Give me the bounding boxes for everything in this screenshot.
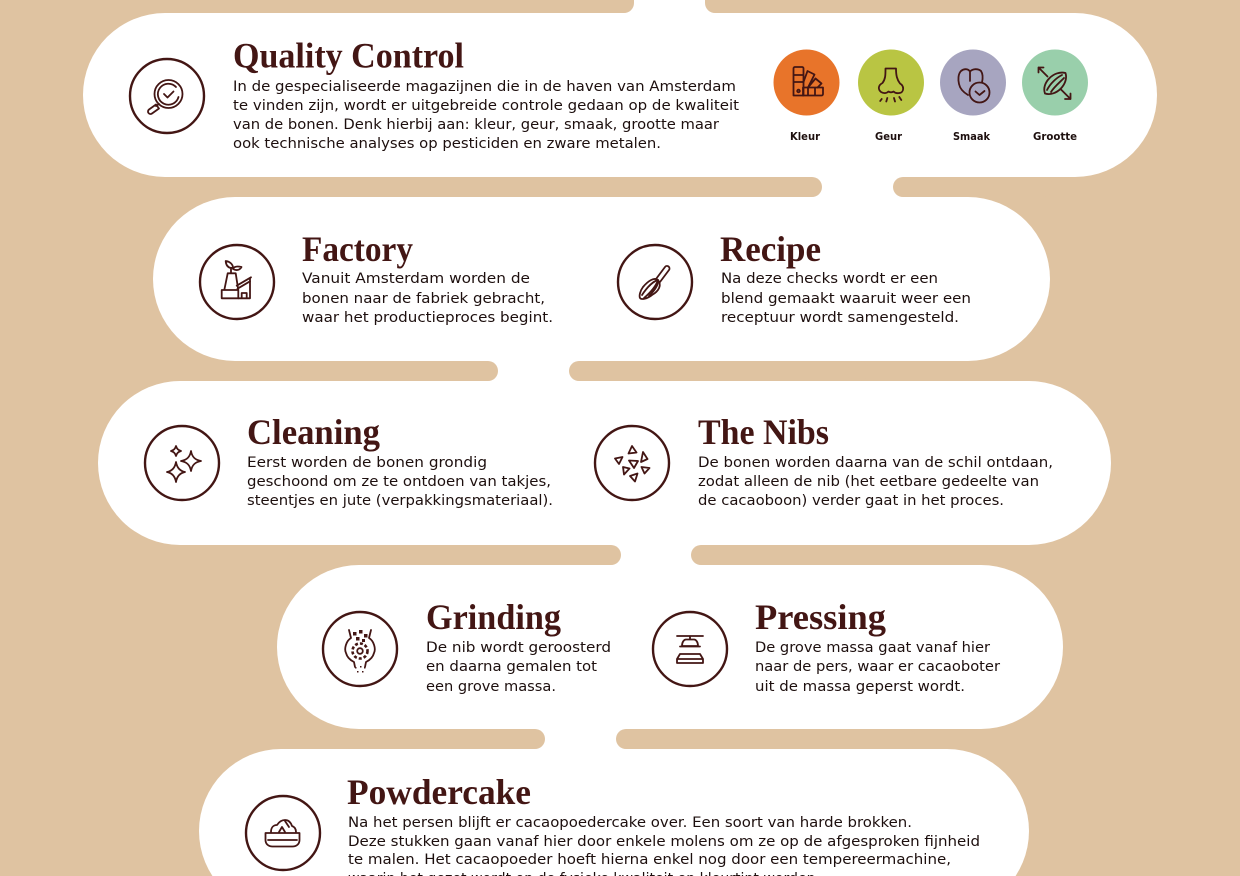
text: grinding body: De nib wordt geroosterd [426, 640, 611, 656]
icon: grootte [1022, 50, 1088, 116]
text: factory body: bonen naar de fabriek gebracht, [302, 291, 545, 307]
label: smaak: Smaak [953, 131, 991, 143]
icon: geur [858, 50, 924, 116]
text: recipe body: Na deze checks wordt er een [721, 271, 938, 287]
label: grootte: Grootte [1033, 131, 1077, 143]
heading: quality control: Quality Control [233, 36, 464, 76]
panel: cleaning and the nibs [98, 381, 1111, 545]
label: kleur: Kleur [790, 131, 821, 143]
text: pressing body: uit de massa geperst wordt. [755, 679, 965, 695]
heading: recipe: Recipe [720, 229, 821, 269]
panel: powdercake [199, 749, 1029, 876]
text: powdercake body: Na het persen blijft er cacaopoedercake over. Een soort van harde brokken. [348, 815, 912, 831]
panel: grinding and pressing [277, 565, 1063, 729]
heading: powdercake: Powdercake [347, 772, 531, 812]
connector: cleaning to grinding [350, 543, 991, 567]
text: factory body [302, 271, 553, 326]
text: cleaning body: steentjes en jute (verpakkingsmateriaal). [247, 493, 553, 509]
text: grinding body: en daarna gemalen tot [426, 659, 597, 675]
icon: sparkles [145, 426, 219, 500]
text: factory body: Vanuit Amsterdam worden de [302, 271, 530, 287]
text: recipe body: blend gemaakt waaruit weer een [721, 291, 971, 307]
text: quality control body: In de gespecialiseerde magazijnen die in de haven van Amsterdam [233, 79, 736, 95]
text: pressing body: De grove massa gaat vanaf hier [755, 640, 990, 656]
text: pressing body [755, 640, 1000, 695]
text: pressing body: naar de pers, waar er cacaoboter [755, 659, 1000, 675]
heading: cleaning: Cleaning [247, 412, 380, 452]
text: factory body: waar het productieproces begint. [302, 310, 553, 326]
icon: nibs [595, 426, 669, 500]
text: quality control body: te vinden zijn, wordt er uitgebreide controle gedaan op de kwaliteit [233, 98, 739, 114]
text: recipe body: receptuur wordt samengesteld. [721, 310, 959, 326]
text: the nibs body [698, 455, 1053, 509]
text: cleaning body: Eerst worden de bonen grondig [247, 455, 487, 471]
icon: kleur [774, 50, 840, 116]
text: grinding body: een grove massa. [426, 679, 556, 695]
connector: factory to cleaning [300, 359, 869, 383]
connector: grinding to powdercake [340, 727, 916, 751]
label: geur: Geur [875, 131, 903, 143]
heading: grinding: Grinding [426, 597, 561, 637]
icon: bowl with chunks [246, 796, 320, 870]
text: quality control body: ook technische analyses op pesticiden en zware metalen. [233, 136, 661, 152]
text: powdercake body [348, 815, 980, 876]
text: the nibs body: zodat alleen de nib (het eetbare gedeelte van [698, 474, 1039, 490]
connector: quality control to factory [600, 175, 1053, 199]
text: cleaning body: geschoond om ze te ontdoen van takjes, [247, 474, 551, 490]
icon: factory [200, 245, 274, 319]
icon: smaak [940, 50, 1006, 116]
icon: whisk [618, 245, 692, 319]
icon: press [653, 612, 727, 686]
icon: magnifier with check [130, 59, 204, 133]
text: quality control body: van de bonen. Denk hierbij aan: kleur, geur, smaak, grootte maar [233, 117, 719, 133]
heading: factory: Factory [302, 229, 413, 269]
panel: factory and recipe [153, 197, 1050, 361]
icon: grinder [323, 612, 397, 686]
text: powdercake body: te malen. Het cacaopoeder hoeft hierna enkel nog door een tempereermachine, [348, 852, 951, 868]
text: the nibs body: de cacaoboon) verder gaat in het proces. [698, 493, 1004, 509]
connector: top [500, 0, 905, 13]
panel: quality control [83, 13, 1157, 177]
text: cleaning body [247, 455, 553, 509]
text: grinding body [426, 640, 611, 695]
heading: pressing: Pressing [755, 597, 886, 637]
text: the nibs body: De bonen worden daarna van de schil ontdaan, [698, 455, 1053, 471]
text: recipe body [721, 271, 971, 326]
text: quality control body [233, 79, 739, 152]
text: powdercake body: Deze stukken gaan vanaf hier door enkele molens om ze op de afgesproken fijnheid [348, 834, 980, 850]
heading: the nibs: The Nibs [698, 412, 829, 452]
